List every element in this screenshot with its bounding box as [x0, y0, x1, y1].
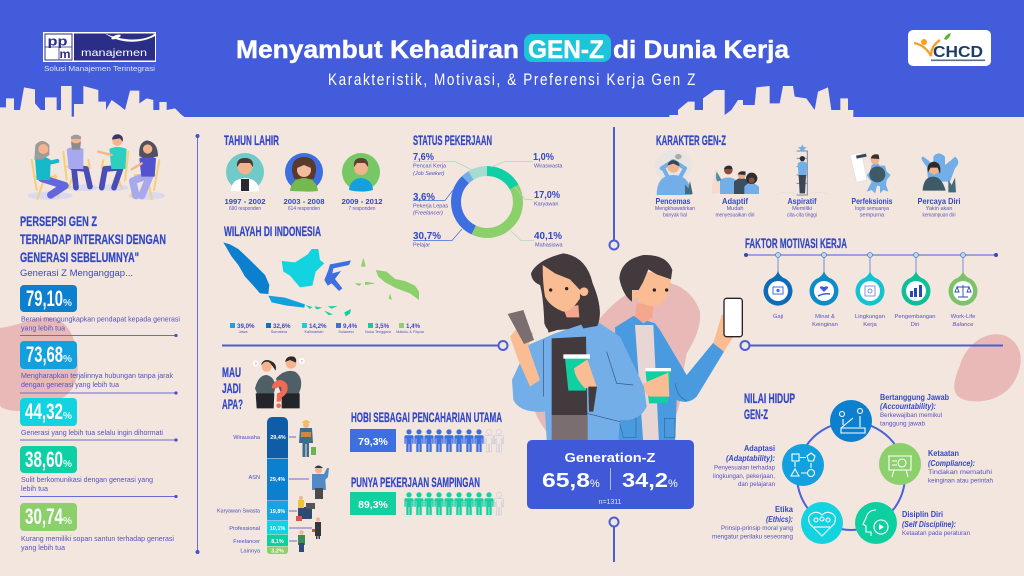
heading: nilai hidup: GEN-Z	[744, 406, 768, 422]
heading: mau jadi apa	[222, 364, 243, 412]
panel: pekerjaan sampingan	[350, 474, 504, 515]
stacked bar chart: 29,4%	[270, 477, 285, 483]
text: ethics: mengatur perilaku seseorang	[712, 534, 793, 540]
heading: persepsi gen z: Generasi Z Menganggap...	[20, 268, 133, 278]
card: generation-z: %	[590, 478, 600, 490]
heading: mau jadi apa: JADI	[222, 380, 241, 396]
logo: PPM manajemen: manajemen	[81, 47, 147, 59]
icon: ASN figure	[312, 466, 329, 499]
header band	[0, 0, 1024, 117]
heading: tahun lahir: TAHUN LAHIR	[224, 132, 279, 148]
drop: gaji	[764, 271, 792, 306]
labels: motivation	[773, 314, 975, 328]
drop: minat	[809, 271, 838, 306]
stat: 38,60%	[20, 446, 178, 498]
text: adaptability	[713, 444, 775, 488]
title: GEN-Z	[528, 36, 604, 64]
pictogram: 8 of 10	[404, 429, 504, 452]
subtitle: Karakteristik, Motivasi, & Preferensi Kerja Gen Z	[328, 70, 697, 89]
labels: right: Karyawan	[534, 202, 558, 208]
stat: 79,10%: 79,10	[26, 286, 63, 311]
labels: motivation: Gaji	[773, 314, 783, 320]
labels: left: 30,7%	[413, 231, 441, 242]
stat box: 89,3%: 89,3%	[358, 499, 389, 511]
labels: motivation: Diri	[911, 322, 919, 328]
leader lines	[413, 162, 534, 240]
drop: pengembangan	[902, 271, 931, 306]
value: compliance	[879, 443, 921, 485]
labels: left: Pelajar	[413, 242, 430, 248]
pictogram: 9 of 10	[404, 492, 504, 515]
labels: right	[533, 152, 563, 248]
stacked bar chart: ASN	[248, 475, 260, 481]
labels: motivation: Minat &	[815, 314, 835, 320]
illustration: thinking couple: ?	[254, 361, 257, 366]
labels: motivation: Lingkungan	[855, 314, 885, 320]
legend: island shares: Nusa Tenggara	[365, 330, 392, 334]
labels: characters: Yakin akan	[926, 206, 952, 212]
text: compliance: Tindakan mematuhi	[928, 469, 992, 476]
decorative pink blobs	[0, 317, 1021, 411]
text: ethics: Etika	[775, 505, 794, 514]
text: accountability: Bertanggung Jawab	[880, 393, 949, 402]
stat box: 79,3%	[350, 429, 396, 452]
labels: characters: Aspiratif	[788, 196, 817, 206]
stat: 44,32%: 44,32	[25, 399, 63, 424]
timeline	[744, 252, 998, 272]
labels: left	[413, 152, 448, 248]
icon: wirausaha figure	[299, 420, 316, 457]
legend: island shares: 39,0%	[237, 323, 255, 330]
labels: left: (Job Seeker)	[413, 171, 445, 177]
card: generation-z: 65,8	[542, 470, 590, 492]
heading: persepsi gen z: PERSEPSI GEN Z	[20, 213, 97, 229]
stat: 38,60%: Sulit berkomunikasi dengan generasi yang	[21, 475, 153, 484]
labels: right: Mahasiswa	[535, 242, 563, 248]
text: ethics: Prinsip-prinsip moral yang	[721, 525, 793, 532]
stat box: 89,3%	[350, 492, 396, 515]
icon: freelancer figure	[298, 530, 305, 552]
panel: faktor motivasi kerja	[744, 235, 998, 328]
heading: sampingan: PUNYA PEKERJAAN SAMPINGAN	[351, 474, 480, 490]
logo: CHCD	[908, 30, 991, 66]
stacked bar chart: 3,2%	[271, 548, 284, 554]
labels: characters: Adaptif	[722, 196, 748, 206]
text: compliance: Ketaatan	[928, 449, 959, 458]
stacked bar chart: Lainnya	[240, 548, 261, 554]
labels: left: Pekerja Lepas	[413, 204, 448, 210]
legend: island shares: Maluku & Papua	[396, 330, 425, 334]
panel: status pekerjaan	[413, 132, 563, 248]
legend: island shares: Sumatera	[271, 330, 288, 334]
stat: 30,74%: %	[63, 516, 72, 527]
value: self discipline	[855, 502, 897, 544]
labels: characters: Mengkhawatirkan	[655, 206, 695, 212]
avatar: 1997-2002	[226, 153, 264, 192]
labels: birth years: 7 responden	[348, 206, 376, 212]
stacked bar chart: 29,4%	[270, 435, 286, 441]
heading: hobi: HOBI SEBAGAI PENCAHARIAN UTAMA	[351, 409, 502, 425]
text: adaptability: Adaptasi	[744, 444, 775, 453]
labels: right: 17,0%	[534, 190, 560, 201]
labels: right: 40,1%	[534, 231, 562, 242]
stacked bar chart: Karyawan Swasta	[217, 508, 261, 514]
card: generation-z	[527, 440, 694, 509]
labels: characters: banyak hal	[663, 212, 687, 218]
text: compliance: keinginan atau perintah	[928, 478, 993, 484]
avatar: 2003-2008	[285, 153, 323, 192]
text: adaptability: dan pelajaran	[738, 481, 775, 488]
labels: right: Wiraswasta	[534, 164, 563, 170]
text: adaptability: (Adaptability):	[726, 454, 775, 463]
logo: PPM manajemen: m	[60, 47, 70, 61]
illustrations	[655, 144, 958, 195]
stacked bar chart: 19,8%	[270, 509, 285, 515]
illustration: central gen-z couple	[508, 253, 743, 443]
stat: 79,10%: %	[63, 298, 72, 309]
heading: persepsi gen z	[20, 213, 166, 278]
stat: 79,10%	[20, 285, 180, 337]
text: self discipline	[902, 510, 970, 537]
labels: characters: Pencemas	[656, 196, 691, 206]
text: compliance: (Compliance):	[928, 459, 975, 468]
stat: 38,60%: 38,60	[25, 447, 63, 472]
logo: PPM manajemen: Solusi Manajemen Terintegrasi	[44, 66, 156, 73]
map of Indonesia	[223, 242, 419, 316]
legend: island shares: Kalimantan	[304, 330, 324, 334]
text: self discipline: Ketaatan pada peraturan	[902, 530, 970, 537]
labels: motivation: Work-Life	[951, 314, 975, 320]
labels: characters: Memiliki	[792, 206, 812, 212]
text: accountability: tanggung jawab	[880, 420, 925, 428]
value: adaptability	[782, 444, 824, 486]
legend: island shares: 1,4%	[406, 323, 421, 330]
panel: mau jadi apa	[217, 356, 329, 554]
ring	[797, 422, 905, 530]
labels: characters: cita-cita tinggi	[787, 212, 817, 218]
legend: island shares: 14,2%	[309, 323, 327, 330]
logo: CHCD: CHCD	[933, 44, 983, 61]
panel: nilai hidup gen-z	[712, 390, 993, 544]
legend: island shares: Sulawesi	[338, 330, 354, 334]
labels: motivation: Kerja	[863, 322, 878, 328]
stacked bar chart: 10,1%	[270, 526, 285, 532]
heading: wilayah: WILAYAH DI INDONESIA	[224, 223, 321, 239]
stat: 44,32%: %	[63, 411, 72, 422]
text: ethics	[712, 505, 794, 540]
stacked bar chart: Wirausaha	[233, 435, 261, 441]
icon: karyawan figure	[296, 496, 315, 521]
title	[236, 34, 790, 64]
labels: left: 3,6%	[413, 192, 435, 203]
labels: left: (Freelancer)	[413, 210, 443, 216]
text: accountability: Berkewajiban memikul	[880, 412, 943, 419]
drop: work-life	[948, 271, 977, 306]
panel: karakter gen-z	[655, 132, 960, 218]
stacked bar chart: 8,1%	[271, 539, 284, 545]
logo: PPM manajemen: pp	[48, 34, 68, 48]
stacked bar chart: Freelancer	[233, 539, 260, 545]
labels: right: 1,0%	[533, 152, 554, 163]
heading: persepsi gen z: TERHADAP INTERAKSI DENGAN	[20, 231, 166, 247]
labels: characters: Perfeksionis	[852, 196, 893, 206]
stat: 73,68%	[20, 341, 178, 395]
labels: characters: sempurna	[860, 212, 885, 218]
heading: persepsi gen z: GENERASI SEBELUMNYA"	[20, 249, 139, 265]
panel: wilayah di indonesia	[223, 223, 425, 334]
card: generation-z: 34,2	[622, 470, 668, 492]
labels: characters: Percaya Diri	[918, 196, 960, 206]
stat: 30,74%: yang lebih tua	[21, 543, 66, 552]
heading: status pekerjaan: STATUS PEKERJAAN	[413, 132, 492, 148]
legend: island shares: 3,5%	[375, 323, 390, 330]
labels: birth years: 2009 - 2012	[342, 197, 382, 206]
labels: motivation: Balance	[953, 322, 974, 328]
stat: 38,60%: %	[63, 459, 72, 470]
heading: nilai hidup	[744, 390, 795, 422]
legend: island shares: 9,4%	[343, 323, 358, 330]
heading: faktor motivasi: FAKTOR MOTIVASI KERJA	[745, 235, 847, 251]
text: ethics: (Ethics):	[766, 515, 793, 524]
stat: 44,32%: Generasi yang lebih tua selalu ingin dihormati	[21, 428, 163, 437]
panel: tahun lahir	[224, 132, 382, 212]
stat: 30,74%: 30,74	[25, 504, 64, 529]
labels: birth years: 690 responden	[229, 206, 261, 212]
text: compliance	[928, 449, 993, 484]
stat: 73,68%: %	[63, 354, 72, 365]
legend: island shares	[230, 323, 425, 334]
heading: mau jadi apa: APA?	[222, 396, 243, 412]
title: Menyambut Kehadiran	[236, 36, 519, 64]
labels: motivation: Pengembangan	[895, 314, 935, 320]
legend: island shares: 32,6%	[273, 323, 291, 330]
stacked bar chart: Professional	[229, 526, 260, 532]
text: self discipline: (Self Discipline):	[902, 520, 956, 529]
labels: characters: Mudah	[727, 206, 743, 212]
heading: karakter: KARAKTER GEN-Z	[656, 132, 726, 148]
title: di Dunia Kerja	[613, 36, 790, 64]
labels: birth years: 1997 - 2002	[224, 197, 266, 206]
value: accountability	[830, 400, 872, 442]
stat: 30,74%	[20, 503, 174, 552]
text: accountability	[880, 393, 949, 428]
labels: left: 7,6%	[413, 152, 434, 163]
legend: island shares: Jawa	[239, 330, 248, 334]
stacked bar chart	[217, 417, 312, 554]
donut chart	[456, 171, 518, 233]
card: generation-z: n=1311	[598, 499, 622, 506]
drop: lingkungan	[856, 271, 884, 306]
labels: left: Pencari Kerja	[413, 164, 447, 170]
text: adaptability: Penyesuaian terhadap	[714, 464, 775, 472]
labels: motivation: Keinginan	[812, 322, 838, 328]
illustration: thinking couple	[252, 356, 305, 408]
card: generation-z: Generation-Z	[564, 450, 656, 465]
icon: professional figure	[312, 518, 321, 539]
heading: nilai hidup: NILAI HIDUP	[744, 390, 795, 406]
illustration: group discussion	[27, 134, 165, 200]
labels: characters	[655, 196, 960, 218]
illustration: thinking couple: ?	[300, 358, 303, 363]
labels: birth years: 2003 - 2008	[284, 197, 324, 206]
stat: 79,10%: Berani mengungkapkan pendapat kepada generasi	[21, 314, 180, 324]
text: adaptability: lingkungan, pekerjaan,	[713, 473, 775, 480]
panel: hobi	[350, 409, 504, 452]
stat: 79,10%: yang lebih tua	[21, 324, 66, 332]
text: self discipline: Disiplin Diri	[902, 510, 943, 519]
text: accountability: (Accountability):	[880, 402, 936, 411]
labels: birth years	[224, 197, 382, 212]
stat: 38,60%: lebih tua	[21, 484, 49, 493]
divider lines	[196, 127, 1003, 562]
logo: PPM manajemen	[43, 32, 156, 73]
avatar: 2009-2012	[342, 153, 380, 192]
labels: characters: menyesuaikan diri	[716, 212, 754, 218]
labels: characters: kemampuan diri	[922, 212, 956, 218]
stat box: 79,3%: 79,3%	[358, 436, 389, 448]
stat: 30,74%: Kurang memiliki sopan santun terhadap generasi	[21, 534, 174, 543]
labels: characters: Ingin semuanya	[855, 206, 890, 212]
card: generation-z: %	[668, 478, 678, 490]
value: ethics	[801, 502, 843, 544]
stat: 44,32%	[20, 398, 178, 442]
stat: 73,68%: dengan generasi yang lebih tua	[21, 380, 120, 389]
stat: 73,68%: Mengharapkan terjalinnya hubungan tanpa jarak	[21, 371, 173, 380]
labels: birth years: 614 responden	[288, 206, 320, 212]
stat: 73,68%: 73,68	[26, 342, 63, 367]
heading: mau jadi apa: MAU	[222, 364, 241, 380]
